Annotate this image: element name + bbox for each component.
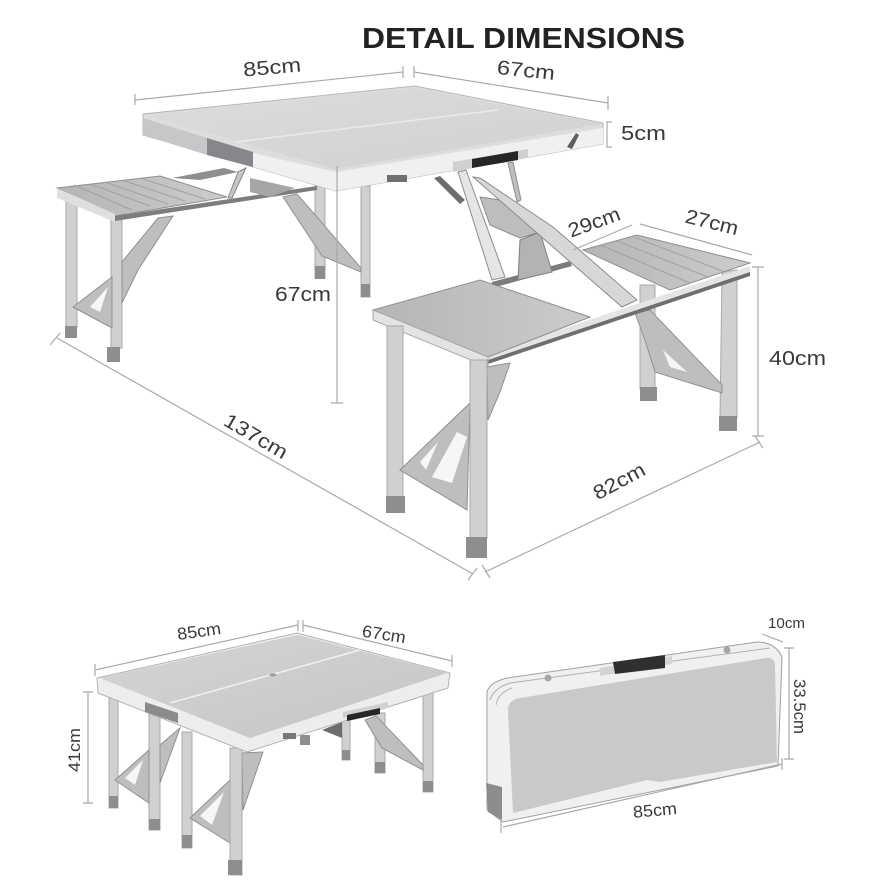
dimension labels main: 85cm [242,55,302,81]
right bench [373,170,750,558]
dimension labels main: 29cm [565,203,623,243]
dimension labels folded case: 33.5cm [790,679,809,734]
folded case illustration [486,642,782,822]
title: DETAIL DIMENSIONS [362,23,685,55]
dimension lines folded case [501,634,794,833]
dimension lines main [50,66,764,580]
small table legs [109,688,433,875]
main table illustration [57,86,750,558]
dimension labels main: 67cm [496,57,556,85]
dimension labels small table: 67cm [361,622,407,647]
dimension labels small table: 85cm [176,619,222,644]
table top small [97,633,450,752]
left bench [57,168,317,362]
case handle [600,656,672,676]
table top [143,86,603,191]
dimension labels small table: 41cm [65,728,84,772]
dimension labels main: 82cm [590,459,649,505]
dimension lines small table [83,620,452,803]
dimension labels main: 5cm [621,123,666,145]
dimension labels main [220,55,826,505]
dimension labels main: 27cm [683,206,741,240]
dimension labels folded case: 10cm [768,615,805,632]
table back legs [283,162,521,297]
dimension labels main: 137cm [220,410,291,464]
dimension labels small table [65,619,407,772]
dimension labels folded case [632,615,809,822]
table hinges and handle [207,138,253,167]
folded-seat table illustration [97,633,450,875]
dimension labels main: 40cm [769,348,826,370]
dimension labels main: 67cm [275,284,331,306]
dimension labels folded case: 85cm [632,799,678,822]
